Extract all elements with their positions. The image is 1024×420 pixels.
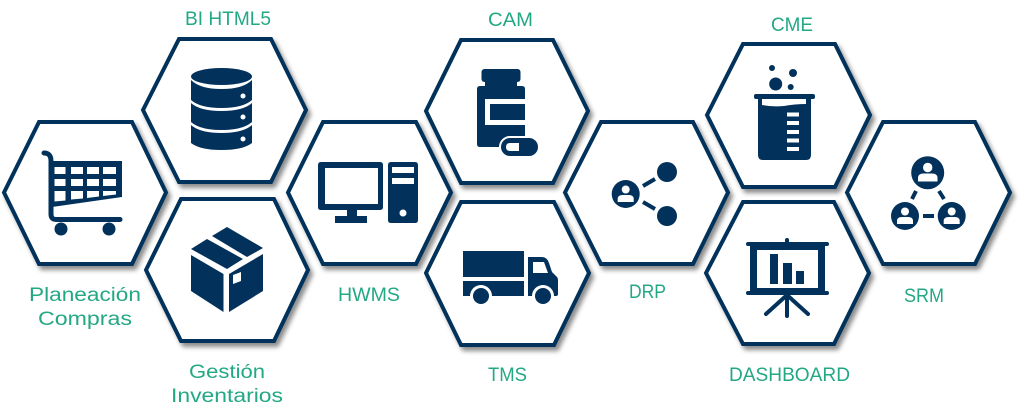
hexagon: DRP [565, 122, 728, 264]
panel: TMS [426, 202, 589, 386]
panel: DRP [565, 122, 728, 303]
hexagon: BI HTML5 [143, 39, 306, 182]
panel: CME [707, 15, 870, 187]
label: DRP: DRP [629, 282, 666, 303]
hexagon: DASHBOARD [706, 202, 869, 344]
hexagon: TMS [426, 202, 589, 345]
panel: HWMS [288, 122, 451, 306]
icon: computer [318, 162, 418, 223]
icon: people network [891, 156, 966, 230]
label: HWMS: HWMS [338, 285, 400, 306]
label: SRM: SRM [904, 286, 944, 307]
panel: DASHBOARD [706, 202, 869, 386]
hexagon: Gestión Inventarios [146, 199, 308, 341]
icon: share nodes [612, 162, 677, 226]
hexagon: SRM [847, 122, 1010, 264]
hexagon: CME [707, 44, 870, 187]
label: BI HTML5: BI HTML5 [185, 9, 271, 30]
hexagon: HWMS [288, 122, 451, 264]
label: TMS: TMS [488, 365, 527, 386]
icon: box [191, 227, 263, 312]
hexagon: CAM [426, 40, 588, 183]
label: CME: CME [771, 15, 813, 36]
label: Gestión Inventarios: Gestión [189, 362, 265, 383]
panel: CAM [426, 10, 588, 183]
label: Planeación Compras [29, 285, 141, 330]
icon: beaker [754, 65, 815, 160]
label: Planeación Compras: Compras [38, 309, 132, 330]
panel: Gestión Inventarios [146, 199, 308, 407]
label: DASHBOARD: DASHBOARD [729, 365, 850, 386]
panel: Planeación Compras [4, 122, 166, 330]
label: Gestión Inventarios: Inventarios [171, 386, 283, 407]
label: Planeación Compras: Planeación [29, 285, 141, 306]
panel: SRM [847, 122, 1010, 307]
hexagon: Planeación Compras [4, 122, 166, 264]
label: Gestión Inventarios [171, 362, 283, 407]
icon: database [191, 68, 252, 150]
icon: medicine bottle [477, 69, 540, 158]
icon: truck [463, 251, 558, 307]
label: CAM: CAM [488, 10, 533, 31]
icon: presentation board [748, 240, 827, 316]
panel: BI HTML5 [143, 9, 306, 182]
icon: shopping cart [44, 153, 122, 236]
